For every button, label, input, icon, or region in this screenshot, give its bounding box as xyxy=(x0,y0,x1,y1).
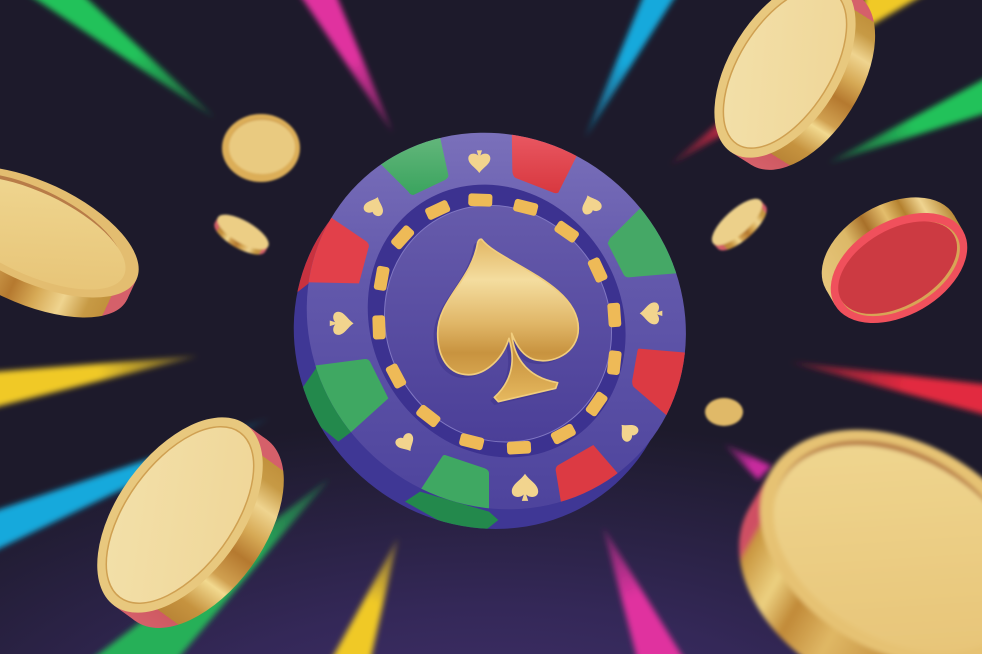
chip edge: coloured side strips xyxy=(297,220,498,529)
chip top face xyxy=(306,132,686,509)
gold coin: top right xyxy=(685,0,904,194)
chip inner ring xyxy=(318,137,675,505)
chip centre disk xyxy=(342,164,654,484)
blurred small coin: right xyxy=(705,192,773,258)
blurred small coin: left xyxy=(209,208,274,261)
small suit icons xyxy=(330,150,662,501)
gold coin: lower left xyxy=(64,388,317,654)
gold coin: left xyxy=(0,139,158,345)
blurred small coin: top left xyxy=(222,114,300,182)
poker chip xyxy=(294,132,686,529)
chip edge xyxy=(216,74,750,607)
gold dashes xyxy=(372,193,622,455)
blurred small coin: lower right xyxy=(705,398,743,426)
red coin: right xyxy=(802,175,982,346)
large gold spade xyxy=(434,239,578,405)
blurred gold coin: bottom right xyxy=(697,382,982,654)
chip face segments xyxy=(308,134,685,508)
background glow xyxy=(0,420,982,654)
